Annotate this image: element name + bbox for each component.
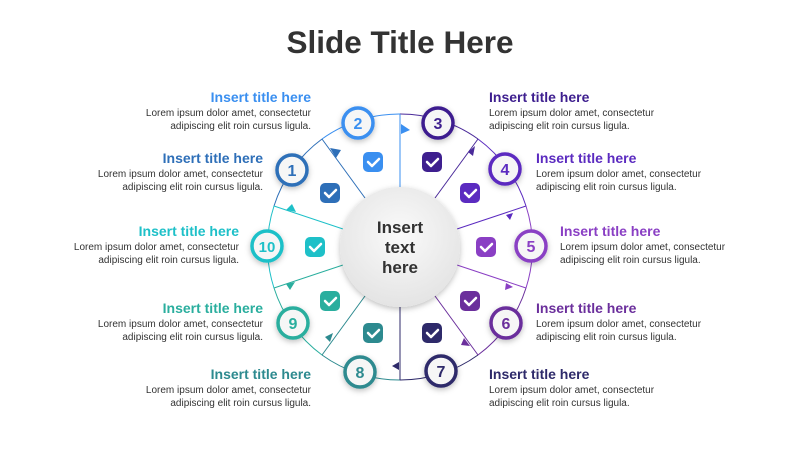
number badges: 1 — [288, 163, 297, 180]
number badges — [252, 108, 546, 387]
text blocks left — [74, 89, 312, 409]
center circle — [340, 187, 460, 307]
center circle: text — [385, 238, 415, 257]
text blocks left: Lorem ipsum dolor amet, consectetur — [74, 242, 240, 253]
number badges: 10 — [259, 239, 275, 256]
ring and dividers — [268, 114, 532, 380]
text blocks left: Lorem ipsum dolor amet, consectetur — [146, 385, 312, 396]
text blocks right: adipiscing elit roin cursus ligula. — [560, 255, 701, 266]
number badges: 2 — [354, 116, 363, 133]
text blocks right: Insert title here — [560, 223, 661, 239]
text blocks right — [489, 89, 726, 409]
text blocks left: Insert title here — [163, 300, 263, 316]
text blocks left: adipiscing elit roin cursus ligula. — [170, 121, 311, 132]
text blocks left: Lorem ipsum dolor amet, consectetur — [98, 169, 264, 180]
text blocks right: Insert title here — [489, 89, 590, 105]
text blocks right: adipiscing elit roin cursus ligula. — [536, 182, 677, 193]
text blocks left: Insert title here — [211, 89, 311, 105]
text blocks left: Lorem ipsum dolor amet, consectetur — [98, 319, 264, 330]
number badges: 6 — [502, 316, 511, 333]
text blocks right: Lorem ipsum dolor amet, consectetur — [560, 242, 726, 253]
text blocks left: Insert title here — [211, 366, 311, 382]
number badges: 9 — [289, 316, 298, 333]
number badges: 8 — [356, 365, 365, 382]
text blocks right: Lorem ipsum dolor amet, consectetur — [489, 385, 655, 396]
text blocks right: Insert title here — [489, 366, 590, 382]
text blocks right: Insert title here — [536, 150, 637, 166]
text blocks left: Insert title here — [163, 150, 263, 166]
text blocks left: Lorem ipsum dolor amet, consectetur — [146, 108, 312, 119]
title: Slide Title Here — [286, 24, 514, 60]
text blocks left: adipiscing elit roin cursus ligula. — [170, 398, 311, 409]
text blocks right: adipiscing elit roin cursus ligula. — [489, 121, 630, 132]
number badges: 5 — [527, 239, 536, 256]
checkboxes — [305, 152, 496, 343]
text blocks right: Lorem ipsum dolor amet, consectetur — [536, 319, 702, 330]
text blocks right: Lorem ipsum dolor amet, consectetur — [489, 108, 655, 119]
number badges: 7 — [437, 364, 446, 381]
text blocks right: adipiscing elit roin cursus ligula. — [536, 332, 677, 343]
text blocks right: adipiscing elit roin cursus ligula. — [489, 398, 630, 409]
center circle: here — [382, 258, 418, 277]
text blocks left: adipiscing elit roin cursus ligula. — [122, 332, 263, 343]
text blocks right: Lorem ipsum dolor amet, consectetur — [536, 169, 702, 180]
center circle: Insert — [377, 218, 423, 237]
text blocks left: adipiscing elit roin cursus ligula. — [122, 182, 263, 193]
arrow markers — [286, 124, 513, 370]
number badges: 3 — [434, 116, 443, 133]
text blocks left: adipiscing elit roin cursus ligula. — [98, 255, 239, 266]
number badges: 4 — [501, 162, 510, 179]
text blocks left: Insert title here — [139, 223, 239, 239]
text blocks right: Insert title here — [536, 300, 637, 316]
